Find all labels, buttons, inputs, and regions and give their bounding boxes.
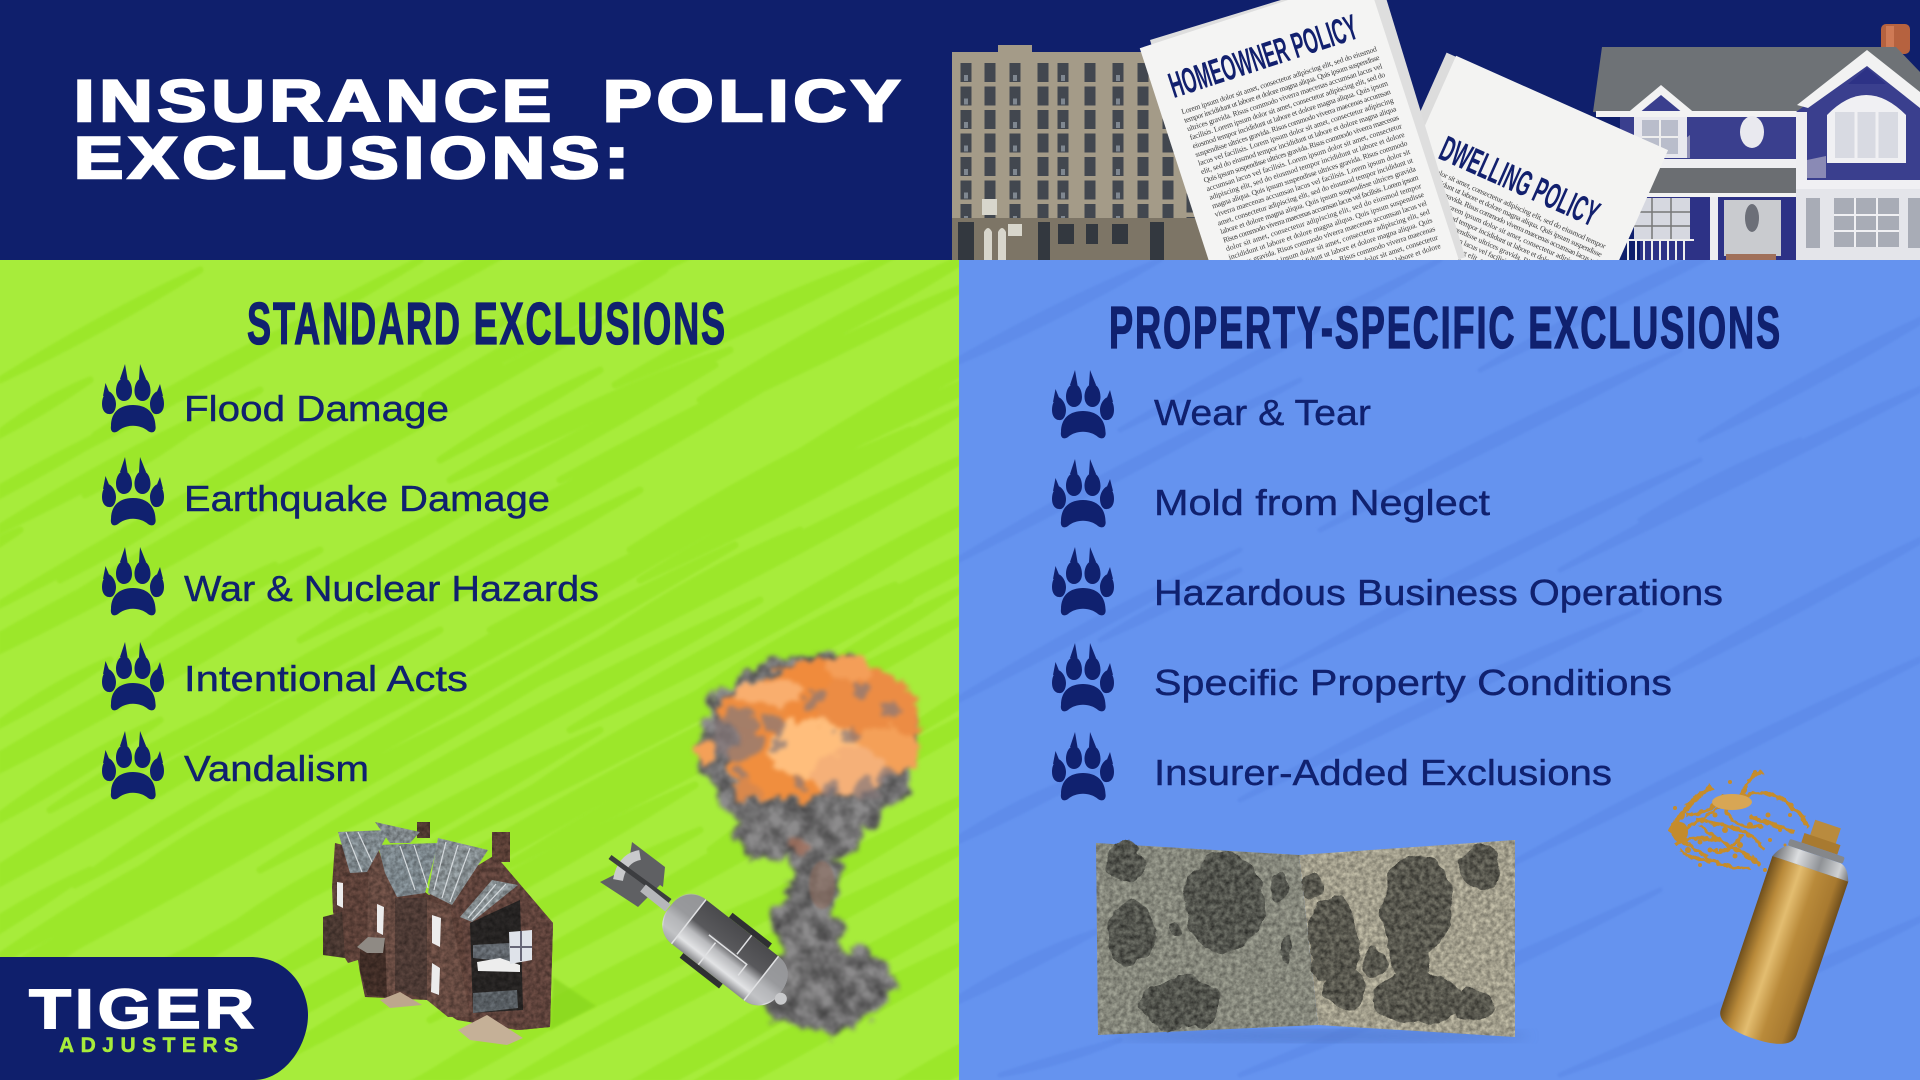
title	[74, 69, 905, 191]
dwelling policy body copy: ultrices gravida. Risus commodo viverra maecenas accumsan lacus vel	[1423, 182, 1600, 267]
icon: tiger paw	[102, 364, 164, 432]
homeowner policy body copy: do eiusmod tempor incididunt ut labore et dolore magna aliqua. Quis	[1236, 215, 1434, 287]
homeowner policy body copy: incididunt ut labore et dolore magna aliqua. Quis ipsum suspendisse	[1227, 190, 1426, 262]
icon: tiger paw	[102, 731, 164, 799]
logo badge: tiger adjusters	[0, 957, 308, 1080]
illustration: suburban house	[1593, 24, 1920, 262]
homeowner policy body copy: facilisis. Lorem ipsum dolor sit amet, consectetur adipiscing elit, sed do	[1188, 70, 1386, 142]
icon: tiger paw	[1052, 643, 1114, 711]
panel: property-specific exclusions	[959, 260, 1920, 1080]
homeowner policy body copy: ipsum suspendisse ultrices gravida. Risus commodo viverra maecenas	[1239, 224, 1436, 296]
logo wordmark: TIGER	[29, 977, 258, 1040]
list: standard exclusions	[102, 364, 599, 799]
homeowner policy body copy: Quis ipsum suspendisse ultrices gravida. Risus commodo viverra maecenas	[1202, 113, 1400, 185]
list item: hazardous business operations: Hazardous Business Operations	[1154, 572, 1723, 613]
homeowner policy body copy: accumsan lacus vel facilisis. Lorem ipsum dolor sit amet, consectetur	[1241, 232, 1439, 305]
illustration: damaged brick house	[323, 822, 596, 1045]
icon: tiger paw	[1052, 370, 1114, 438]
illustration: moldy wall	[1096, 840, 1530, 1042]
homeowner policy body copy: eiusmod tempor incididunt ut labore et dolore magna aliqua. Quis ipsum	[1191, 79, 1389, 150]
header band	[0, 0, 1920, 260]
list item: intentional acts: Intentional Acts	[184, 658, 468, 699]
homeowner policy body copy: Lorem ipsum dolor sit amet, consectetur adipiscing elit, sed do eiusmod	[1180, 44, 1378, 116]
title: POLICY	[603, 69, 905, 134]
homeowner policy body copy	[1180, 44, 1443, 313]
dwelling policy body copy: facilisis. Lorem ipsum dolor sit amet, consectetur adipiscing elit	[1419, 190, 1597, 276]
list item: specific property conditions: Specific Property Conditions	[1154, 662, 1672, 703]
illustration: homeowner policy document	[1140, 0, 1465, 353]
homeowner policy body copy: viverra maecenas accumsan lacus vel facilisis. Lorem ipsum dolor sit	[1213, 147, 1412, 219]
illustration: gold spray can	[1670, 770, 1864, 1051]
dwelling policy body copy: sed do eiusmod tempor incididunt ut labore et dolore magna aliqua	[1415, 198, 1593, 284]
homeowner policy body copy: suspendisse ultrices gravida. Risus commodo viverra maecenas accumsan	[1194, 87, 1392, 159]
homeowner policy body copy: adipiscing elit, sed do eiusmod tempor incididunt ut labore et dolore	[1244, 241, 1442, 313]
mold patches	[1107, 843, 1501, 1030]
oval window	[1740, 116, 1764, 148]
dwelling policy body copy: gravida. Risus commodo viverra maecenas accumsan lacus vel facilisis	[1397, 239, 1574, 325]
dwelling policy body copy: incididunt ut labore et dolore magna aliqua. Quis ipsum suspendisse	[1426, 173, 1604, 259]
icon: tiger paw	[1052, 547, 1114, 615]
heading: standard exclusions: STANDARD EXCLUSIONS	[247, 291, 727, 357]
list: property-specific exclusions	[1052, 370, 1723, 800]
dwelling policy body copy: consectetur adipiscing elit, sed do eiusmod tempor incididunt ut	[1404, 223, 1582, 309]
homeowner policy body copy: ultrices gravida. Risus commodo viverra maecenas accumsan lacus vel	[1230, 198, 1428, 270]
dwelling policy body copy	[1393, 165, 1608, 333]
homeowner policy body copy: facilisis. Lorem ipsum dolor sit amet, consectetur adipiscing elit, sed	[1233, 207, 1431, 279]
logo tagline: ADJUSTERS	[59, 1034, 238, 1057]
icon: tiger paw	[1052, 732, 1114, 800]
dwelling policy body copy: labore et dolore magna aliqua. Quis ipsum suspendisse ultrices	[1401, 231, 1578, 316]
homeowner policy body copy: amet, consectetur adipiscing elit, sed do eiusmod tempor incididunt ut	[1216, 155, 1415, 227]
panel: standard exclusions	[0, 260, 959, 1080]
homeowner policy body copy: tempor incididunt ut labore et dolore magna aliqua. Quis ipsum suspendisse	[1183, 53, 1381, 125]
icon: tiger paw	[102, 457, 164, 525]
list item: earthquake damage: Earthquake Damage	[184, 478, 550, 519]
illustration: falling bomb	[600, 842, 809, 1026]
illustration: apartment building	[952, 45, 1210, 260]
dwelling policy body copy: Dolor sit amet, consectetur adipiscing elit, sed do eiusmod tempor	[1430, 165, 1608, 251]
dwelling policy body copy: Quis ipsum suspendisse ultrices gravida. Risus commodo viverra	[1412, 206, 1590, 292]
title: EXCLUSIONS:	[74, 126, 634, 191]
left dormer	[1625, 85, 1697, 158]
list item: insurer-added exclusions: Insurer-Added Exclusions	[1154, 752, 1612, 793]
list item: vandalism: Vandalism	[184, 748, 369, 789]
list item: war and nuclear hazards: War & Nuclear Hazards	[184, 568, 599, 609]
right gable section	[1796, 50, 1920, 262]
list item: mold from neglect: Mold from Neglect	[1154, 482, 1490, 523]
list item: flood damage: Flood Damage	[184, 388, 449, 429]
dwelling policy body copy: Lorem ipsum dolor sit amet, consectetur adipiscing elit, sed do	[1393, 247, 1571, 333]
spray splash	[1670, 770, 1808, 872]
homeowner policy body copy: elit, sed do eiusmod tempor incididunt ut labore et dolore magna aliqua	[1200, 104, 1398, 176]
homeowner policy body copy: ultrices gravida. Risus commodo viverra maecenas accumsan lacus vel	[1186, 61, 1383, 133]
icon: tiger paw	[1052, 459, 1114, 527]
homeowner policy body copy: lacus vel facilisis. Lorem ipsum dolor sit amet, consectetur adipiscing	[1197, 96, 1395, 168]
homeowner policy body copy: labore et dolore magna aliqua. Quis ipsum suspendisse ultrices gravida	[1219, 164, 1417, 236]
roofs	[338, 822, 518, 922]
icon: tiger paw	[102, 547, 164, 615]
illustration: explosion cloud	[698, 654, 921, 1034]
dwelling policy label: DWELLING POLICY	[1434, 128, 1606, 234]
title: INSURANCE	[74, 69, 556, 134]
homeowner policy body copy: adipiscing elit, sed do eiusmod tempor incididunt ut labore et dolore	[1208, 130, 1406, 202]
illustration: dwelling policy document	[1320, 52, 1668, 434]
list item: wear and tear: Wear & Tear	[1154, 392, 1371, 433]
icon: tiger paw	[102, 642, 164, 710]
homeowner policy body copy: Risus commodo viverra maecenas accumsan lacus vel facilisis. Lorem ipsum	[1222, 173, 1420, 245]
dwelling policy body copy: maecenas accumsan lacus vel facilisis. Lorem ipsum dolor sit amet	[1408, 214, 1586, 300]
homeowner policy body copy: dolor sit amet, consectetur adipiscing elit, sed do eiusmod tempor	[1225, 181, 1423, 253]
homeowner policy body copy: magna aliqua. Quis ipsum suspendisse ultrices gravida. Risus commodo	[1211, 138, 1409, 210]
homeowner policy body copy: accumsan lacus vel facilisis. Lorem ipsum dolor sit amet, consectetur	[1205, 121, 1403, 193]
